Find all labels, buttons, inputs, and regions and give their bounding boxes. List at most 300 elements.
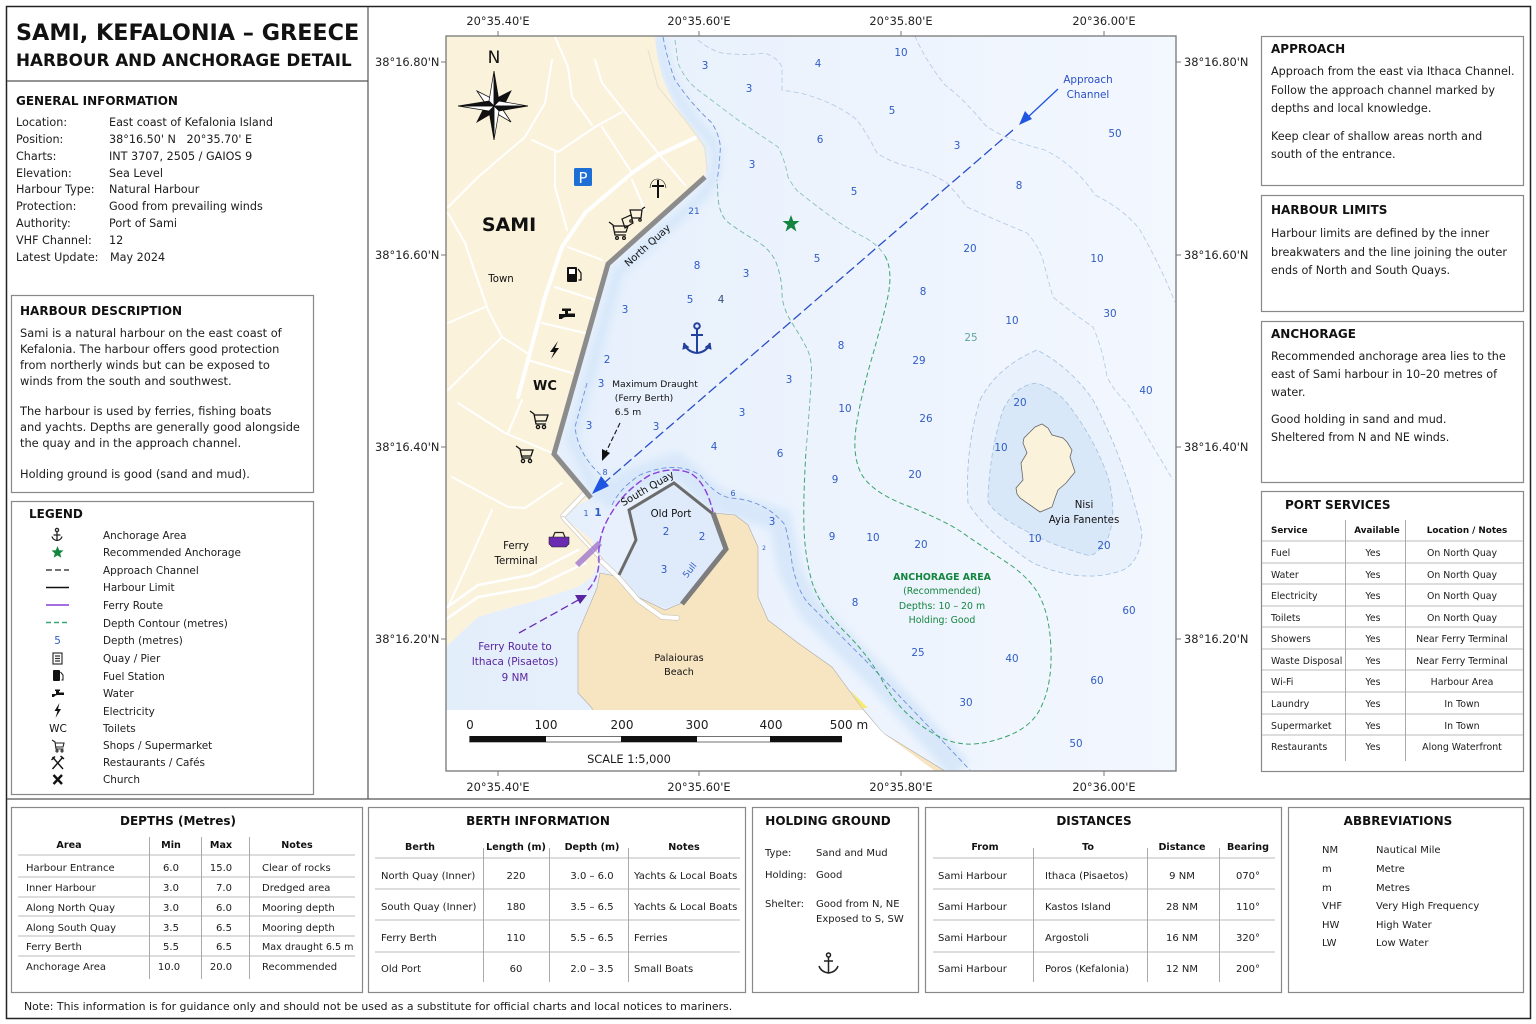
legend labels: Harbour Limit (103, 582, 175, 594)
panel: depths table: Ferry Berth (26, 942, 82, 953)
panel: general information: INT 3707, 2505 / GAIOS 9 (109, 150, 252, 163)
panel: general information: Port of Sami (109, 217, 177, 230)
legend: fuel icon (53, 670, 63, 681)
legend: water tap (52, 690, 64, 697)
legend labels: Toilets (102, 723, 136, 735)
panel: depths table: 10.0 (158, 962, 180, 973)
depth soundings: 4 (711, 441, 718, 453)
approach channel line (592, 130, 1013, 494)
depth soundings: 10 (866, 532, 880, 544)
panel: port services: Fuel (1271, 548, 1290, 559)
shopping carts near quay (609, 207, 645, 239)
depth soundings: 50 (1108, 128, 1122, 140)
panel: anchorage: Sheltered from N and NE winds. (1271, 431, 1449, 444)
panel: harbour limits: Harbour limits are defined by the inner (1271, 227, 1490, 240)
panel: holding ground: Good from N, NE (816, 899, 900, 910)
depth soundings: 60 (1122, 605, 1136, 617)
depth soundings: 8 (694, 260, 700, 272)
panel: approach: depths and local knowledge. (1271, 102, 1431, 115)
legend labels: Shops / Supermarket (103, 740, 212, 752)
panel: port services: Waste Disposal (1271, 656, 1342, 667)
panel: berth information table: 60 (510, 964, 522, 975)
coordinate labels: 38°16.40'N (1184, 440, 1248, 454)
panel: distances table: 200° (1236, 964, 1260, 975)
depth soundings: 6 (817, 134, 823, 146)
panel: harbour description: the quay and in the approach channel. (20, 436, 241, 450)
panel: general information: Harbour Type: (16, 183, 95, 196)
panel: holding ground: Exposed to S, SW (816, 914, 904, 925)
panel: port services: Yes (1364, 613, 1381, 624)
depth soundings: 3 (786, 374, 792, 386)
coordinate labels: 38°16.60'N (375, 248, 439, 262)
panel: berth information table: 2.0 – 3.5 (570, 964, 614, 975)
panel: depths table: DEPTHS (Metres) (120, 814, 236, 828)
panel: distances table: Sami Harbour (938, 902, 1008, 913)
panel: port services: Yes (1364, 634, 1381, 645)
legend: electricity bolt (54, 703, 61, 718)
Palaiouras beach (578, 513, 945, 771)
depth soundings: 5 (889, 105, 895, 117)
church symbol (650, 179, 666, 198)
panel: port services: Electricity (1271, 591, 1318, 602)
panel: port services: Wi-Fi (1271, 677, 1293, 688)
panel: port services: In Town (1444, 699, 1480, 710)
panel: general information: VHF Channel: (16, 234, 92, 247)
town roads (445, 37, 707, 620)
panel: abbreviations: m (1322, 864, 1332, 875)
map labels: ANCHORAGE AREA (893, 572, 992, 583)
panel: depths table: 3.0 (163, 903, 179, 914)
panel: depths table: Notes (281, 840, 313, 851)
map labels: Old Port (651, 509, 691, 520)
scale bar: 500 m (830, 718, 868, 732)
depth soundings: 1 (583, 509, 589, 518)
compass rose (458, 48, 528, 140)
depth soundings: 3 (586, 420, 592, 432)
panel: holding ground: Shelter: (765, 899, 804, 910)
scale bar: 300 (686, 718, 708, 732)
title: HARBOUR AND ANCHORAGE DETAIL (16, 50, 352, 70)
depth soundings: 20 (1097, 540, 1111, 552)
coordinate labels: 20°36.00'E (1072, 780, 1136, 794)
legend labels: Church (103, 774, 140, 786)
legend: church (54, 775, 62, 784)
legend labels: Approach Channel (103, 565, 199, 577)
panel: port services (1262, 492, 1524, 772)
panel: port services: PORT SERVICES (1285, 498, 1391, 512)
scale bar (466, 718, 868, 766)
panel: distances table: 9 NM (1169, 871, 1195, 882)
panel: holding ground (752, 808, 918, 992)
panel: general information: May 2024 (110, 251, 165, 264)
map labels: Ferry Route to (478, 641, 552, 653)
panel: depths table: 7.0 (216, 883, 232, 894)
panel: distances table: To (1082, 842, 1094, 853)
panel: abbreviations: ABBREVIATIONS (1344, 814, 1452, 828)
map labels: Channel (1067, 89, 1109, 101)
depth soundings: 3 (746, 83, 752, 95)
panel: harbour description: The harbour is used by ferries, fishing boats (19, 404, 271, 418)
panel: distances table: Bearing (1227, 842, 1269, 853)
legend: shopping cart (52, 740, 64, 752)
panel: depths table: Clear of rocks (262, 863, 331, 874)
depth soundings: 3 (661, 564, 667, 576)
depth soundings: 10 (894, 47, 908, 59)
panel: port services: Toilets (1270, 613, 1301, 624)
compass rose: N (488, 48, 500, 68)
depth soundings: 25 (911, 647, 925, 659)
panel: port services: On North Quay (1427, 570, 1498, 581)
depth soundings: 9 (832, 474, 838, 486)
map labels: South Quay (619, 470, 676, 509)
panel: port services: Service (1271, 526, 1308, 536)
panel: berth information table: 3.5 – 6.5 (570, 902, 614, 913)
panel: abbreviations: Metre (1376, 864, 1405, 875)
ferry symbol (549, 532, 569, 547)
depth soundings: 30 (1103, 308, 1117, 320)
panel: legend (12, 502, 314, 794)
panel: general information: Elevation: (16, 167, 72, 180)
panel: abbreviations: m (1322, 883, 1332, 894)
panel: distances table: From (971, 842, 999, 853)
depth soundings: 9 (829, 531, 835, 543)
depth soundings: 3 (702, 60, 708, 72)
panel: berth information table: Ferries (634, 933, 668, 944)
panel: anchorage: ANCHORAGE (1271, 327, 1356, 341)
panel: port services: Laundry (1271, 699, 1310, 710)
panel: harbour limits: HARBOUR LIMITS (1271, 203, 1387, 217)
depth soundings: 10 (1090, 253, 1104, 265)
panel: abbreviations: Low Water (1376, 938, 1429, 949)
depth soundings: 40 (1139, 385, 1153, 397)
panel: general information: Authority: (16, 217, 71, 230)
water tap symbol (559, 308, 575, 319)
panel: general information: 38°16.50' N 20°35.70' E (109, 133, 252, 146)
legend labels: Depth (metres) (103, 635, 183, 647)
map labels: Nisi (1075, 500, 1093, 511)
map labels: Palaiouras (654, 653, 704, 664)
panel: general information: East coast of Kefalonia Island (109, 116, 273, 129)
legend labels: Quay / Pier (103, 653, 161, 665)
depth soundings: 26 (919, 413, 933, 425)
panel: berth information table: Old Port (381, 964, 421, 975)
depth soundings: 5 (687, 294, 693, 306)
legend labels: Ferry Route (103, 600, 163, 612)
panel: port services: Harbour Area (1431, 677, 1493, 688)
map labels: North Quay (623, 223, 673, 269)
panel: distances table: 110° (1236, 902, 1260, 913)
panel: depths table: Dredged area (262, 883, 330, 894)
map labels: 6.5 m (615, 407, 641, 418)
contour: teal near-shore (675, 40, 800, 193)
depth soundings: 5ull (681, 561, 699, 580)
panel: approach (1262, 36, 1524, 186)
panel: port services: Along Waterfront (1422, 742, 1502, 753)
depth soundings: 8 (852, 597, 858, 609)
panel: anchorage: east of Sami harbour in 10–20 metres of (1271, 368, 1498, 381)
panel: general information: Natural Harbour (109, 183, 200, 196)
panel: abbreviations: LW (1322, 938, 1337, 949)
panel: general information: Latest Update: (16, 251, 98, 264)
panel: distances table: Ithaca (Pisaetos) (1045, 871, 1128, 882)
panel: port services: Yes (1364, 699, 1381, 710)
panel: depths table: Harbour Entrance (26, 863, 115, 874)
scale bar: SCALE 1:5,000 (587, 752, 671, 766)
panel: distances table: Poros (Kefalonia) (1045, 964, 1129, 975)
panel: abbreviations: Metres (1376, 883, 1410, 894)
panel: port services: On North Quay (1427, 613, 1498, 624)
depth soundings: 1 (594, 507, 602, 519)
panel: depths table: 6.0 (216, 903, 232, 914)
map labels: Ayia Fanentes (1049, 515, 1119, 526)
panel: depths table: 6.5 (216, 923, 232, 934)
panel: general information: 12 (109, 234, 123, 247)
electricity symbol (550, 341, 559, 359)
footer note: Note: This information is for guidance only and should not be used as a substitute for official charts and local notices to mariners. (24, 1000, 732, 1013)
panel: port services: Water (1271, 570, 1299, 581)
panel: depths table: Along South Quay (26, 923, 116, 934)
coordinate labels: 20°36.00'E (1072, 14, 1136, 28)
depth soundings: 20 (963, 243, 977, 255)
panel: harbour limits: breakwaters and the line joining the outer (1271, 246, 1507, 259)
scale bar background (446, 710, 935, 771)
depth soundings: 2 (699, 531, 705, 543)
panel: port services: In Town (1444, 721, 1480, 732)
depth soundings: 6 (777, 448, 783, 460)
panel: berth information table: Ferry Berth (381, 933, 437, 944)
panel: depths table: Max draught 6.5 m (262, 942, 354, 953)
depth soundings (583, 47, 1153, 750)
north quay (554, 177, 705, 498)
panel: legend: LEGEND (29, 507, 83, 521)
island halos (1074, 380, 1142, 576)
depth soundings: 8 (838, 340, 844, 352)
coordinate labels: 38°16.40'N (375, 440, 439, 454)
panel: general information: Sea Level (109, 167, 163, 180)
panel: depths table: 6.0 (163, 863, 179, 874)
depth soundings: 3 (598, 378, 604, 390)
depth soundings: 10 (1028, 533, 1042, 545)
panel: port services: Showers (1271, 634, 1311, 645)
depth soundings: 3 (743, 268, 749, 280)
panel: general information: Protection: (16, 200, 76, 213)
depth soundings: 4 (718, 294, 725, 306)
depth soundings: 3 (954, 140, 960, 152)
depth soundings: 3 (739, 407, 745, 419)
map labels: Terminal (493, 556, 538, 567)
panel: port services: Supermarket (1271, 721, 1332, 732)
depth soundings: 2 (663, 526, 669, 538)
panel: port services: Restaurants (1271, 742, 1327, 753)
panel: depths table: Area (56, 840, 82, 851)
panel: port services: Yes (1364, 742, 1381, 753)
panel: harbour limits: ends of North and South Quays. (1271, 264, 1450, 277)
panel: berth information table: South Quay (Inner) (381, 902, 476, 913)
ferry ramp (577, 543, 600, 565)
map labels: Maximum Draught (612, 379, 698, 390)
legend labels (102, 530, 241, 786)
panel: abbreviations: VHF (1322, 901, 1342, 912)
scale bar: 400 (760, 718, 782, 732)
panel: approach: Follow the approach channel marked by (1271, 84, 1495, 97)
panel: holding ground: Type: (764, 848, 791, 859)
map labels: Beach (664, 667, 694, 678)
panel: port services: Yes (1364, 677, 1381, 688)
panel: harbour description: HARBOUR DESCRIPTION (20, 304, 182, 318)
panel: berth information table: 3.0 – 6.0 (570, 871, 614, 882)
panel: depths table: Inner Harbour (26, 883, 97, 894)
legend: line samples (46, 570, 69, 622)
panel: berth information table: 5.5 – 6.5 (570, 933, 614, 944)
panel: berth information table: Small Boats (634, 964, 693, 975)
panel: depths table: 15.0 (210, 863, 232, 874)
depth soundings: 20 (914, 539, 928, 551)
panel: distances table: 320° (1236, 933, 1260, 944)
depth soundings: 5 (814, 253, 820, 265)
contour: island halos (968, 350, 1142, 576)
panel: port services: Yes (1364, 656, 1381, 667)
maximum draught arrow (602, 423, 620, 461)
panel: general information: GENERAL INFORMATION (16, 94, 178, 108)
panel: anchorage: Good holding in sand and mud. (1271, 413, 1446, 426)
coordinate labels: 38°16.60'N (1184, 248, 1248, 262)
panel: distances table: Sami Harbour (938, 964, 1008, 975)
coordinate labels: 38°16.20'N (1184, 632, 1248, 646)
legend: recommended anchorage star (52, 546, 64, 558)
legend labels: Anchorage Area (103, 530, 187, 542)
icon: anchor (819, 953, 838, 973)
anchor symbol (683, 323, 711, 353)
shopping carts lower (516, 411, 548, 463)
panel: abbreviations: HW (1322, 920, 1340, 931)
depth soundings: 10 (838, 403, 852, 415)
depth soundings: 8 (602, 468, 608, 477)
panel: distances table: 28 NM (1166, 902, 1198, 913)
depth soundings: 50 (1069, 738, 1083, 750)
panel: depths table: Max (210, 840, 233, 851)
depth soundings: 4 (815, 58, 822, 70)
panel: distances table: 070° (1236, 871, 1260, 882)
legend labels: Water (103, 688, 135, 700)
ferry route arrow (519, 595, 587, 633)
panel: berth information table: 220 (506, 871, 526, 882)
depth soundings: 2 (762, 545, 766, 552)
panel: holding ground: HOLDING GROUND (765, 814, 891, 828)
panel: berth information table (368, 808, 746, 992)
map labels: (Recommended) (903, 586, 981, 597)
panel: berth information table: BERTH INFORMATION (466, 814, 610, 828)
panel: harbour description: Holding ground is good (sand and mud). (20, 467, 250, 481)
depth soundings: 25 (964, 332, 978, 344)
depth soundings: 2 (604, 354, 610, 366)
legend labels: Depth Contour (metres) (103, 618, 228, 630)
panel: distances table: Sami Harbour (938, 871, 1008, 882)
panel: port services: On North Quay (1427, 548, 1498, 559)
panel: approach: south of the entrance. (1271, 148, 1396, 161)
legend: depth sample: 5 (54, 635, 61, 647)
panel: abbreviations: Nautical Mile (1376, 845, 1441, 856)
panel: berth information table: 180 (506, 902, 526, 913)
contour: pale offshore contours (698, 36, 1175, 480)
map (445, 36, 1176, 771)
coordinate labels: 20°35.40'E (466, 780, 530, 794)
coordinate labels: 20°35.60'E (667, 780, 731, 794)
map labels (472, 74, 1119, 684)
panel: depths table: Anchorage Area (26, 962, 106, 973)
panel: port services: Yes (1364, 721, 1381, 732)
panel: approach: APPROACH (1271, 42, 1345, 56)
map labels: Depths: 10 – 20 m (899, 601, 985, 612)
map labels: Approach (1063, 74, 1113, 86)
panel: holding ground: Good (816, 870, 842, 881)
map labels: 9 NM (502, 672, 528, 684)
panel: port services: On North Quay (1427, 591, 1498, 602)
sea (446, 36, 1176, 771)
ferry route (588, 470, 713, 590)
panel: anchorage (1262, 322, 1524, 482)
panel: distances table: DISTANCES (1056, 814, 1132, 828)
panel: general information (16, 94, 273, 264)
depth soundings: 10 (994, 442, 1008, 454)
depth soundings: 6 (730, 489, 736, 498)
depth soundings: 60 (1090, 675, 1104, 687)
depth soundings: 10 (1005, 315, 1019, 327)
shallow water band (572, 36, 960, 770)
old port basin water (620, 483, 727, 608)
contour: inner blue dashed (575, 37, 970, 770)
depth soundings: 3 (749, 159, 755, 171)
panel: harbour description: Kefalonia. The harbour offers good protection (20, 342, 279, 356)
parking sign (574, 168, 592, 187)
legend labels: Electricity (103, 706, 155, 718)
panel: berth information table: 110 (506, 933, 526, 944)
legend: anchorage area (52, 528, 62, 540)
panel: berth information table: Berth (405, 842, 435, 853)
panel: berth information table: North Quay (Inner) (381, 871, 475, 882)
panel: port services: Yes (1364, 591, 1381, 602)
depth soundings: 5 (851, 186, 857, 198)
title (16, 20, 359, 70)
panel: harbour limits (1262, 196, 1524, 312)
panel: harbour description: winds from the south and southwest. (20, 374, 232, 388)
panel: port services: Yes (1364, 548, 1381, 559)
south quay and old port walls (619, 483, 726, 604)
scale bar: 200 (611, 718, 633, 732)
panel: berth information table: Yachts & Local Boats (633, 902, 737, 913)
panel: approach: Approach from the east via Ithaca Channel. (1271, 65, 1515, 78)
panel: general information: Charts: (16, 150, 56, 163)
coordinate labels: 20°35.60'E (667, 14, 731, 28)
panel: port services: Yes (1364, 570, 1381, 581)
panel: harbour description: and yachts. Depths are generally good alongside (20, 420, 300, 434)
legend labels: Recommended Anchorage (103, 547, 241, 559)
panel: depths table: 3.0 (163, 883, 179, 894)
parking sign: P (578, 169, 588, 187)
panel: depths table: 3.5 (163, 923, 179, 934)
depth soundings: 8 (920, 286, 926, 298)
island: Nisi Ayia Fanentes (1016, 424, 1075, 512)
legend labels: Restaurants / Cafés (103, 757, 205, 769)
panel: distances table: Distance (1158, 842, 1206, 853)
panel: general information: Position: (16, 133, 63, 146)
panel: depths table: Min (161, 840, 181, 851)
WC symbol: WC (533, 379, 557, 394)
panel: depths table: 20.0 (210, 962, 232, 973)
panel: port services: Location / Notes (1427, 526, 1507, 536)
panel: port services: Available (1354, 526, 1400, 536)
depth soundings: 29 (912, 355, 926, 367)
map labels: Ferry (503, 541, 529, 552)
